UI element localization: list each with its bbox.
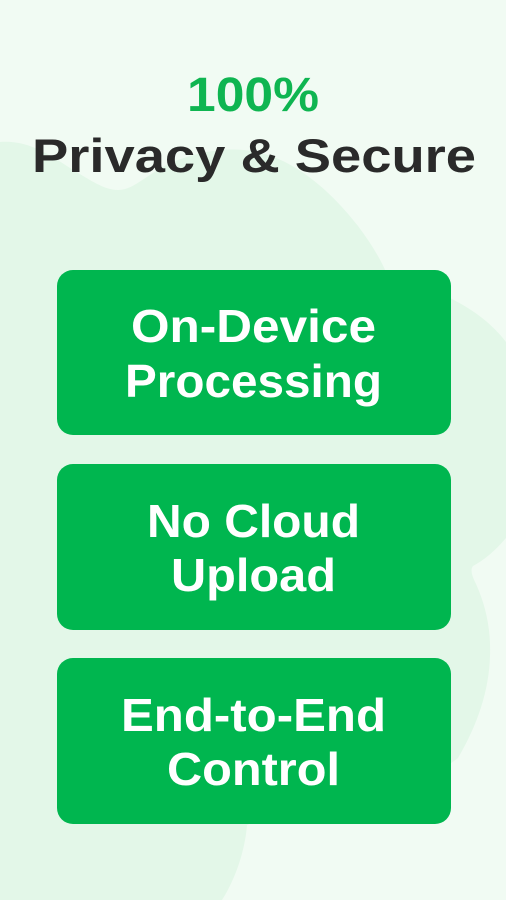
card: End-to-End Control: End-to-End bbox=[121, 689, 386, 741]
card: On-Device Processing: On-Device bbox=[131, 300, 376, 352]
card: End-to-End Control: Control bbox=[167, 743, 340, 795]
card: No Cloud Upload: No Cloud bbox=[147, 495, 360, 547]
card: No Cloud Upload: Upload bbox=[171, 549, 336, 601]
card: On-Device Processing: Processing bbox=[125, 355, 382, 407]
heading: Privacy & Secure: Privacy & Secure bbox=[32, 129, 476, 182]
card: On-Device Processing bbox=[57, 270, 451, 435]
heading: 100%: 100% bbox=[187, 69, 319, 122]
card: No Cloud Upload bbox=[57, 464, 451, 630]
heading bbox=[32, 69, 476, 182]
card: End-to-End Control bbox=[57, 658, 451, 824]
